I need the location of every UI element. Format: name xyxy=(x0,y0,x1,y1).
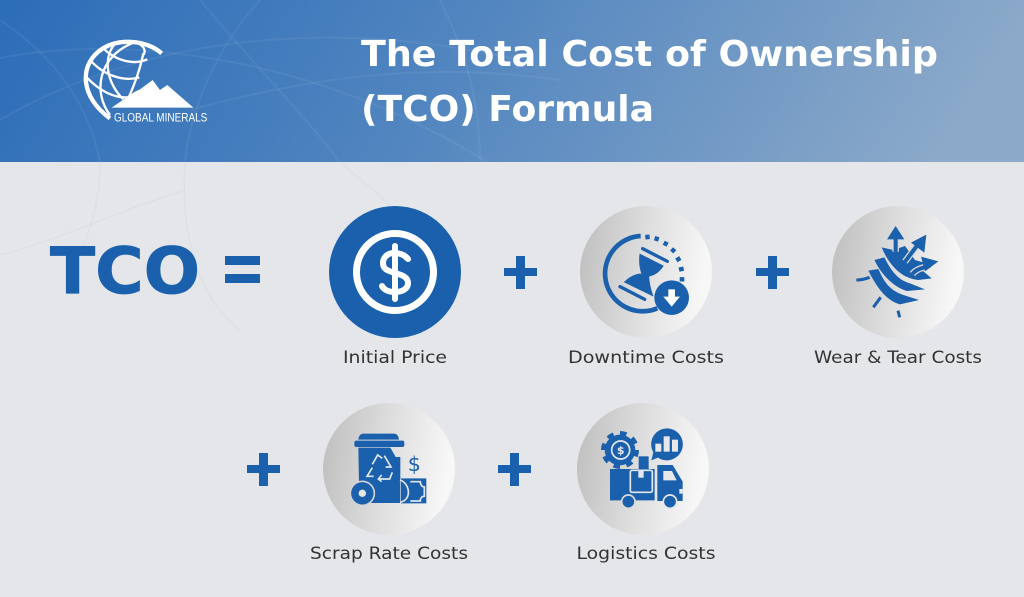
item: Initial Price xyxy=(329,206,461,367)
item: Logistics Costs: Logistics Costs xyxy=(576,544,716,563)
logo wordmark: GLOBAL MINERALS xyxy=(114,111,207,125)
plus signs xyxy=(247,256,789,486)
logo: Global Minerals xyxy=(86,42,207,125)
item: Logistics Costs xyxy=(576,403,716,563)
item: Downtime Costs xyxy=(568,206,724,367)
TCO equals xyxy=(50,235,260,309)
item: Wear & Tear Costs: Wear & Tear Costs xyxy=(814,348,982,367)
title: The Total Cost of Ownership xyxy=(361,34,938,75)
title xyxy=(361,34,938,130)
item: Logistics Costs: $ xyxy=(617,444,624,457)
item: Downtime Costs: Downtime Costs xyxy=(568,348,724,367)
item: Wear & Tear Costs xyxy=(814,206,982,367)
item: Scrap Rate Costs: $ xyxy=(408,452,421,476)
TCO equals: TCO xyxy=(50,235,200,309)
header band xyxy=(0,0,1024,162)
item: Initial Price: Initial Price xyxy=(343,348,447,367)
item: Scrap Rate Costs xyxy=(310,403,468,563)
title: (TCO) Formula xyxy=(361,89,654,130)
item: Scrap Rate Costs: Scrap Rate Costs xyxy=(310,544,468,563)
